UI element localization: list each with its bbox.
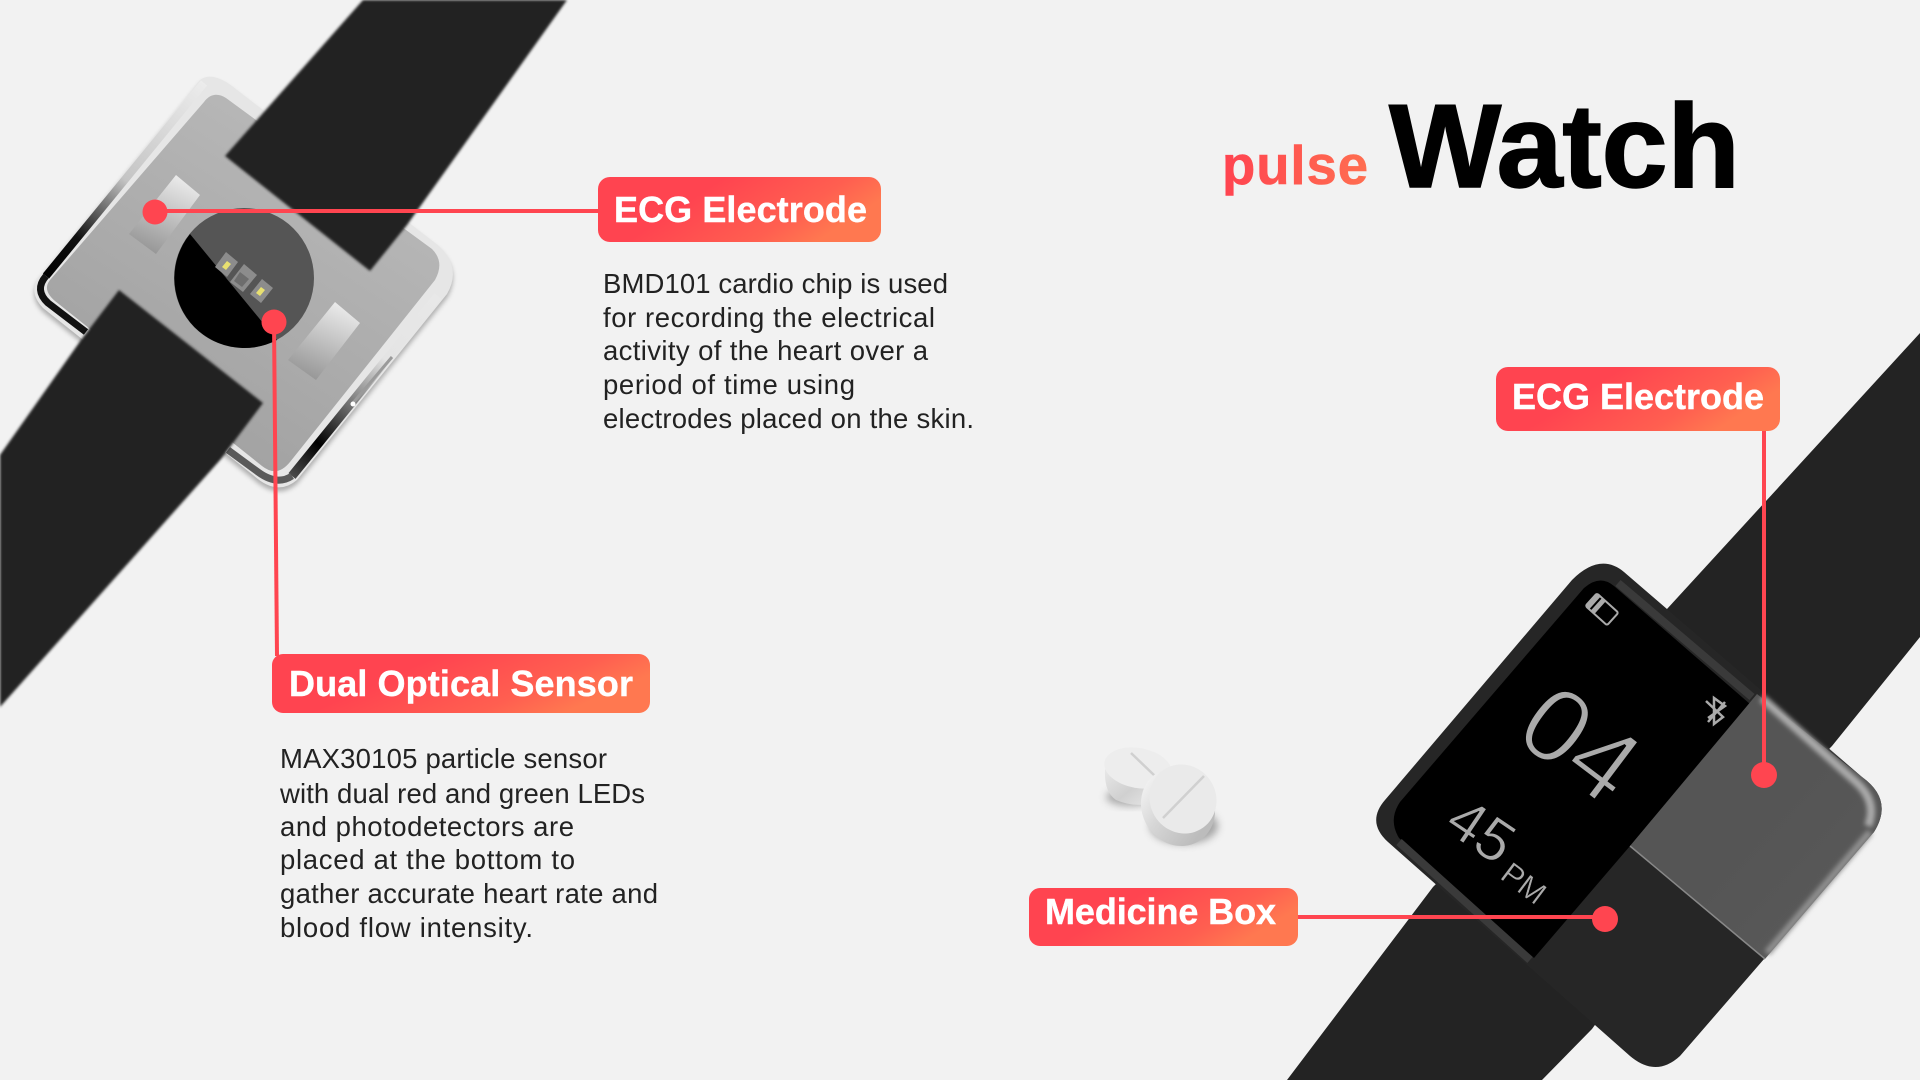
bevel: [1399, 583, 1752, 960]
left electrode: [129, 175, 200, 254]
upper strap: [225, 0, 567, 271]
time period: PM: [1495, 855, 1553, 911]
text block: ECG description: electrodes placed on the skin.: [603, 403, 974, 434]
side button: [350, 357, 392, 406]
title: Watch: Watch: [1389, 80, 1740, 213]
label: ECG Electrode (front): ECG Electrode: [1512, 376, 1764, 417]
callout dot: ECG electrode back: [142, 200, 168, 224]
text block: ECG description: BMD101 cardio chip is used: [603, 268, 948, 299]
text block: optical sensor description: [279, 743, 658, 943]
icon: medicine pills: [1101, 742, 1229, 860]
callout line: dual optical sensor: [274, 322, 277, 656]
callout dot: dual optical sensor: [262, 310, 286, 334]
text block: ECG description: period of time using: [603, 369, 855, 400]
label: Medicine Box: [1029, 888, 1298, 946]
text block: ECG description: activity of the heart over a: [603, 335, 929, 366]
text block: optical sensor description: with dual red and green LEDs: [279, 778, 645, 809]
screen: [1394, 580, 1750, 958]
icon: bluetooth off: [1706, 698, 1725, 724]
text block: optical sensor description: placed at the bottom to: [280, 844, 575, 875]
watch body: [1376, 564, 1882, 1067]
lower strap: [0, 290, 263, 707]
title: [1222, 80, 1740, 213]
text block: ECG description: [603, 268, 974, 434]
time hour: 04: [1497, 661, 1663, 827]
title: pulse: pulse: [1222, 135, 1368, 196]
callout dot: medicine box: [1592, 906, 1618, 932]
time minutes: 45: [1435, 784, 1528, 877]
label: ECG Electrode (front): [1496, 367, 1780, 431]
optical sensor window: [174, 208, 314, 348]
text block: optical sensor description: gather accurate heart rate and: [280, 878, 658, 909]
strap: [1287, 333, 1920, 1080]
callout line: ECG electrode back: [155, 209, 600, 213]
right electrode: [288, 302, 360, 380]
metal band: [1630, 694, 1882, 959]
text block: ECG description: for recording the electrical: [603, 302, 935, 333]
watch case: [34, 77, 453, 491]
callout line: ECG electrode front: [1762, 430, 1766, 776]
callout dot: ECG electrode front: [1751, 762, 1777, 788]
sensor LEDs: [215, 252, 273, 303]
text block: optical sensor description: blood flow intensity.: [280, 912, 533, 943]
panel: watch back view: [0, 0, 567, 707]
text block: optical sensor description: MAX30105 particle sensor: [280, 743, 607, 774]
text block: optical sensor description: and photodetectors are: [280, 811, 574, 842]
label: Dual Optical Sensor: Dual Optical Sensor: [289, 663, 633, 704]
label: ECG Electrode (back): ECG Electrode: [614, 189, 867, 230]
icon: battery: [1585, 593, 1618, 625]
label: Medicine Box: Medicine Box: [1045, 891, 1276, 932]
callout line: medicine box: [1297, 915, 1605, 919]
label: Dual Optical Sensor: [272, 654, 650, 713]
label: ECG Electrode (back): [598, 177, 881, 242]
panel: watch front view: [1287, 333, 1920, 1080]
